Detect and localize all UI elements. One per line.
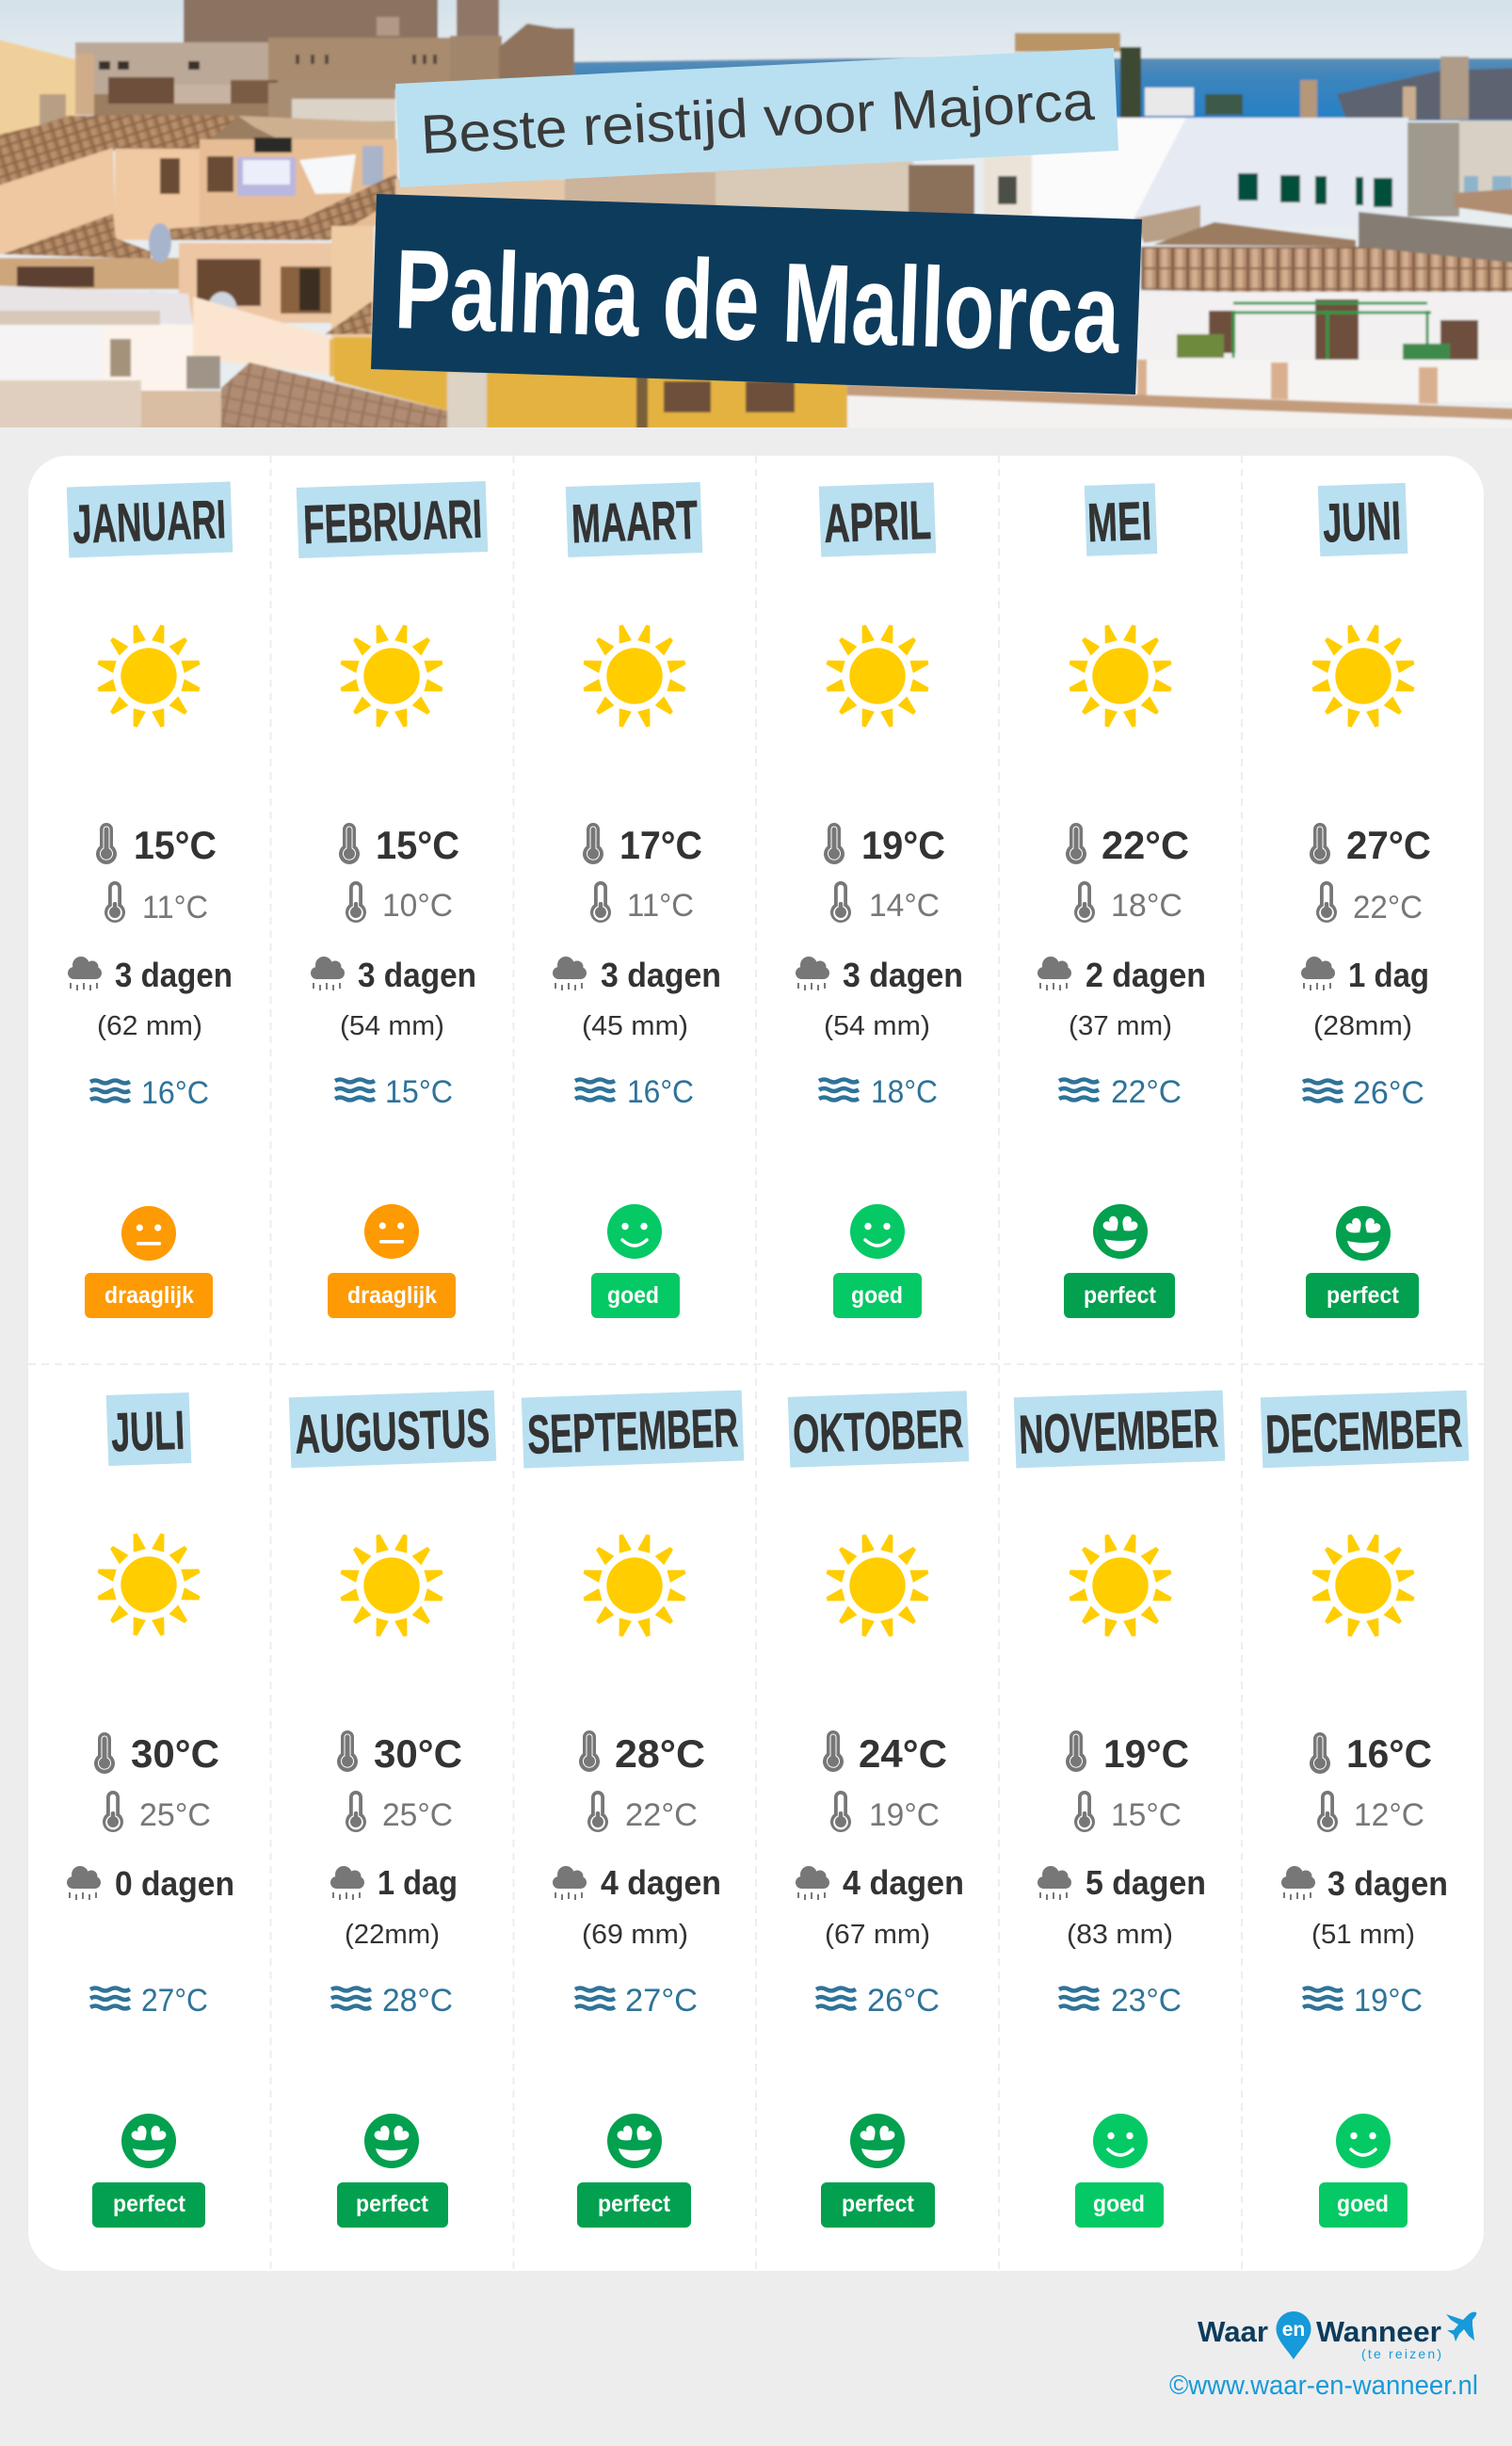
high temperature: 27°C (1346, 823, 1431, 867)
low temperature: 11°C (142, 890, 208, 925)
high temperature: 22°C (1102, 823, 1189, 867)
sea temperature: 26°C (1353, 1075, 1424, 1111)
icon: sun (339, 623, 444, 729)
laundry (237, 146, 383, 196)
rainfall: (45 mm) (582, 1011, 688, 1041)
low temperature (346, 1791, 453, 1833)
month: januari (67, 481, 233, 1318)
month label: OKTOBER (792, 1398, 964, 1465)
high temperature: 30°C (131, 1731, 219, 1776)
rain days: 1 dag (1348, 956, 1429, 994)
big white wall (1184, 115, 1410, 122)
high temperature (824, 823, 945, 867)
high temperature: 15°C (134, 823, 217, 867)
rating: perfect: perfect (1084, 1282, 1157, 1309)
title banner (371, 194, 1142, 394)
yellow house (328, 337, 336, 378)
low temperature: 15°C (1111, 1797, 1182, 1833)
month: december (1261, 1391, 1469, 2228)
month label: FEBRUARI (302, 489, 483, 555)
high temperature (823, 1730, 947, 1776)
sea temperature: 22°C (1111, 1074, 1182, 1110)
rainfall: (62 mm) (97, 1011, 202, 1041)
month: mei (1037, 483, 1206, 1318)
month: september (522, 1390, 744, 2228)
sea temperature: 28°C (382, 1983, 453, 2019)
main roofs left (0, 115, 238, 188)
month label: AUGUSTUS (294, 1397, 491, 1466)
centre buildings (394, 178, 567, 201)
rain days: 3 dagen (1327, 1864, 1448, 1903)
rain days (553, 956, 721, 994)
icon: sun (96, 1532, 201, 1637)
rain days: 5 dagen (1086, 1863, 1206, 1902)
sea temperature (1303, 1983, 1423, 2019)
low temperature: 25°C (139, 1797, 211, 1833)
high temperature: 15°C (376, 823, 459, 867)
month: augustus (289, 1391, 496, 2228)
rain days: 4 dagen (843, 1863, 964, 1902)
sea temperature: 18°C (871, 1074, 938, 1110)
rain days (67, 1864, 234, 1903)
rating: goed (591, 1204, 680, 1318)
rainfall: (67 mm) (825, 1920, 930, 1950)
month: juli (67, 1392, 234, 2228)
month label: JULI (110, 1400, 185, 1463)
month label (566, 482, 702, 557)
sea temperature: 19°C (1354, 1983, 1423, 2019)
subtitle banner (395, 48, 1118, 187)
white buildings bottom left (0, 285, 193, 325)
rainfall: (28mm) (1313, 1011, 1412, 1041)
sea temperature (575, 1074, 694, 1110)
low temperature: 22°C (1353, 890, 1423, 925)
rating: goed: goed (1337, 2191, 1389, 2217)
rain days (1037, 956, 1206, 994)
cathedral (184, 0, 574, 89)
month label: JANUARI (72, 489, 227, 555)
month label (67, 481, 233, 558)
high temperature: 17°C (619, 823, 702, 867)
high temperature: 19°C (861, 823, 945, 867)
satellite dishes (149, 223, 171, 263)
icon: sun (1068, 623, 1173, 729)
low temperature (1074, 881, 1182, 924)
white terrace building (1137, 292, 1512, 362)
rating: goed (1319, 2114, 1407, 2228)
month label: APRIL (823, 490, 932, 555)
low temperature (1074, 1791, 1182, 1833)
rating: goed: goed (607, 1282, 659, 1309)
icon: sun (825, 623, 930, 729)
rain days: 3 dagen (601, 956, 721, 994)
high temperature: 19°C (1103, 1731, 1189, 1776)
icon: sun (1068, 1533, 1173, 1638)
month label (819, 482, 936, 557)
sea temperature: 27°C (625, 1983, 698, 2019)
green windows (1238, 173, 1392, 207)
sea temperature: 15°C (385, 1074, 453, 1110)
month label (1014, 1391, 1225, 1468)
icon: sun (1311, 623, 1416, 729)
icon: sun (582, 1533, 687, 1638)
month label (106, 1392, 191, 1466)
high temperature (96, 823, 217, 867)
high temperature (1310, 1731, 1432, 1776)
logo: Waar en Wanneer: Wanneer (1316, 2315, 1441, 2348)
header photo: rooftops of Palma (0, 0, 1512, 437)
sea temperature (1059, 1074, 1182, 1110)
low temperature: 10°C (382, 888, 453, 924)
icon: sun (96, 623, 201, 729)
sea temperature (90, 1075, 209, 1111)
rating: perfect (337, 2114, 448, 2228)
rain days (1281, 1864, 1448, 1903)
low temperature (587, 1791, 698, 1833)
month label (297, 481, 488, 558)
month label (1318, 483, 1407, 556)
low temperature (1316, 881, 1423, 925)
low temperature (346, 881, 453, 924)
rating: draaglijk (328, 1204, 456, 1318)
rain days: 3 dagen (115, 956, 233, 994)
panel: months grid (28, 456, 1484, 2271)
rain days (553, 1863, 721, 1902)
sea temperature (819, 1074, 938, 1110)
rating: goed (833, 1204, 922, 1318)
icon: sun (339, 1533, 444, 1638)
rain days: 3 dagen (843, 956, 963, 994)
rain days: 3 dagen (358, 956, 476, 994)
far buildings left (75, 42, 268, 104)
rating: perfect (821, 2114, 935, 2228)
low temperature (590, 881, 694, 924)
high temperature (337, 1730, 462, 1776)
high temperature: 30°C (374, 1731, 462, 1776)
low temperature: 14°C (869, 888, 940, 924)
sea temperature: 27°C (141, 1983, 208, 2019)
rating: goed: goed (1093, 2191, 1145, 2217)
tiled roofs right (1455, 188, 1512, 217)
right skyline (1145, 88, 1194, 116)
high temperature (1066, 1730, 1189, 1776)
rating: perfect (92, 2114, 205, 2228)
low temperature: 25°C (382, 1797, 453, 1833)
rating: perfect (1306, 1206, 1419, 1318)
icon: sun (825, 1533, 930, 1638)
sea temperature (575, 1983, 698, 2019)
logo: Waar en Wanneer (1198, 2311, 1476, 2361)
rain days (311, 956, 476, 994)
month label: MEI (1086, 491, 1152, 554)
rating: goed (1075, 2114, 1164, 2228)
month: maart (553, 482, 721, 1318)
rain days: 2 dagen (1086, 956, 1206, 994)
subtitle banner: Beste reistijd voor Majorca (419, 71, 1097, 166)
low temperature: 19°C (869, 1797, 940, 1833)
sea temperature (90, 1983, 208, 2019)
logo: Waar en Wanneer: (te reizen) (1361, 2346, 1441, 2361)
rain days (796, 1863, 964, 1902)
top tan building and tree (1015, 33, 1120, 52)
rain days (68, 956, 233, 994)
rainfall: (51 mm) (1311, 1920, 1415, 1950)
rating: perfect (1064, 1204, 1175, 1318)
month label (788, 1391, 969, 1468)
month label: NOVEMBER (1018, 1397, 1219, 1466)
sea temperature (816, 1983, 940, 2019)
rating: goed: goed (851, 1282, 903, 1309)
rating: perfect: perfect (842, 2191, 915, 2217)
rating: perfect: perfect (1327, 1282, 1400, 1309)
month: februari (297, 481, 488, 1318)
rainfall: (54 mm) (824, 1011, 930, 1041)
sea temperature (1303, 1075, 1424, 1111)
high temperature (1310, 823, 1431, 867)
rating: perfect: perfect (598, 2191, 671, 2217)
sea temperature: 23°C (1111, 1983, 1182, 2019)
low temperature: 22°C (625, 1797, 698, 1833)
website credit: ©www.waar-en-wanneer.nl (1169, 2371, 1478, 2401)
month label (1085, 483, 1157, 556)
month: juni (1301, 483, 1431, 1318)
logo: Waar en Wanneer: Waar (1198, 2315, 1268, 2348)
rainfall: (69 mm) (582, 1920, 688, 1950)
month: oktober (788, 1391, 969, 2228)
low temperature: 11°C (627, 888, 694, 924)
rain days (330, 1863, 458, 1902)
icon: map pin (1277, 2311, 1311, 2359)
low temperature (103, 1791, 211, 1833)
rating: draaglijk: draaglijk (105, 1282, 194, 1309)
icon: sun (582, 623, 687, 729)
rating: perfect (577, 2114, 691, 2228)
rain days: 1 dag (378, 1863, 458, 1902)
low temperature (105, 881, 208, 925)
sea temperature (331, 1983, 453, 2019)
rating: draaglijk (85, 1206, 213, 1318)
rain days: 0 dagen (115, 1864, 234, 1903)
sea temperature: 26°C (867, 1983, 940, 2019)
rating: draaglijk: draaglijk (347, 1282, 437, 1309)
month label (289, 1391, 496, 1468)
rainfall: (54 mm) (340, 1011, 444, 1041)
rain days (1301, 956, 1429, 994)
high temperature (579, 1730, 705, 1776)
month label: JUNI (1322, 491, 1402, 554)
icon: airplane (1446, 2312, 1476, 2341)
high temperature: 28°C (615, 1731, 705, 1776)
rating: perfect: perfect (113, 2191, 186, 2217)
month label: SEPTEMBER (526, 1397, 739, 1466)
sea (565, 58, 1512, 121)
low temperature: 18°C (1111, 888, 1182, 924)
low temperature (830, 881, 940, 924)
rain days (796, 956, 963, 994)
rainfall: (22mm) (345, 1920, 440, 1950)
rainfall: (37 mm) (1069, 1011, 1172, 1041)
high temperature: 24°C (859, 1731, 947, 1776)
sea temperature (335, 1074, 453, 1110)
sea temperature (1059, 1983, 1182, 2019)
high temperature (583, 823, 702, 867)
lower wall (1109, 360, 1512, 402)
low temperature (830, 1791, 940, 1833)
month label: MAART (571, 490, 699, 555)
rating: perfect: perfect (356, 2191, 429, 2217)
sea temperature: 16°C (141, 1075, 209, 1111)
month label (522, 1390, 744, 1469)
title banner: Palma de Mallorca (393, 226, 1122, 378)
rainfall: (83 mm) (1067, 1920, 1173, 1950)
low temperature (1317, 1791, 1424, 1833)
icon: map pin: en (1282, 2319, 1305, 2341)
low temperature: 12°C (1354, 1797, 1424, 1833)
sea temperature: 16°C (627, 1074, 694, 1110)
month: april (796, 482, 963, 1318)
high temperature (339, 823, 459, 867)
month: november (1014, 1391, 1225, 2228)
rain days: 4 dagen (601, 1863, 721, 1902)
high temperature: 16°C (1346, 1731, 1432, 1776)
rain days (1037, 1863, 1206, 1902)
icon: sun (1311, 1533, 1416, 1638)
